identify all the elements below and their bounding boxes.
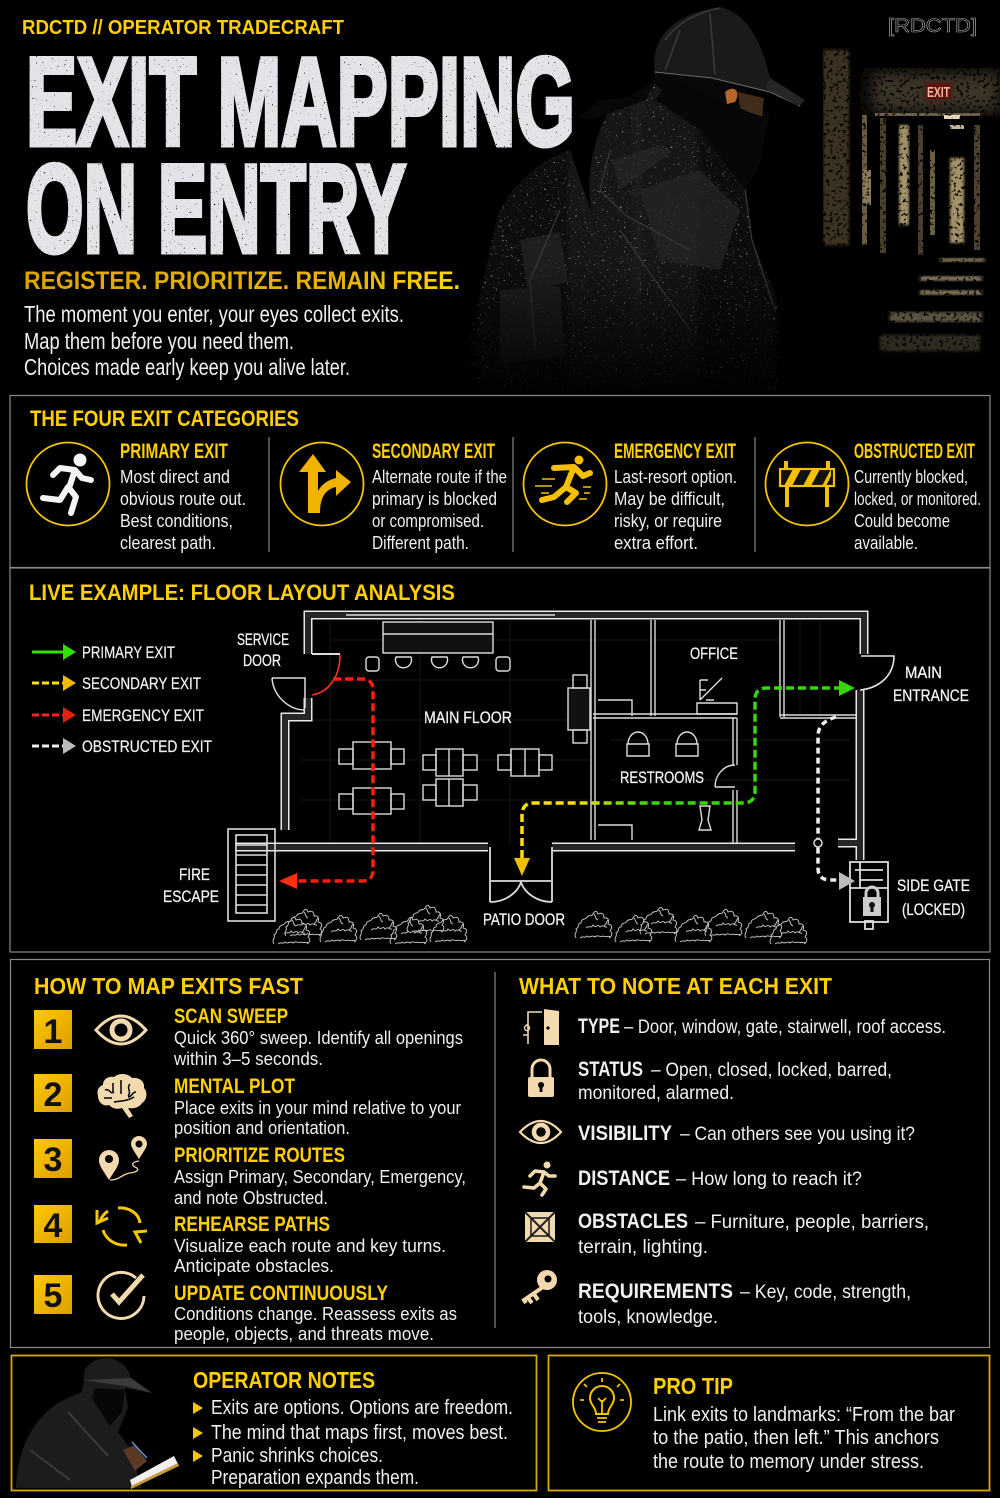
intro text: Choices made early keep you alive later. bbox=[24, 354, 350, 380]
side gate bbox=[850, 862, 888, 929]
step 5: 5 bbox=[44, 1277, 62, 1315]
note: requirements: tools, knowledge. bbox=[578, 1307, 718, 1328]
note: obstacles: terrain, lighting. bbox=[578, 1237, 708, 1258]
route: emergency bbox=[279, 679, 373, 889]
heading: LIVE EXAMPLE: FLOOR LAYOUT ANALYSIS bbox=[29, 580, 455, 605]
legend: OBSTRUCTED EXIT bbox=[82, 737, 212, 756]
hero panel bbox=[22, 7, 1000, 395]
icon: white runner bbox=[26, 442, 110, 526]
intro text: The moment you enter, your eyes collect exits. bbox=[24, 301, 404, 327]
category: obstructed exit: Currently blocked, bbox=[854, 467, 968, 487]
note: visibility bbox=[520, 1121, 915, 1145]
step 5: people, objects, and threats move. bbox=[174, 1323, 434, 1344]
step 1: Quick 360° sweep. Identify all openings bbox=[174, 1027, 463, 1048]
icon: gold runner bbox=[524, 442, 606, 526]
category: emergency exit: Last-resort option. bbox=[614, 467, 737, 487]
hero operator figure bbox=[460, 7, 805, 395]
note: distance: – How long to reach it? bbox=[676, 1169, 862, 1190]
icon: light bulb bbox=[573, 1373, 631, 1431]
note: obstacles: – Furniture, people, barriers, bbox=[695, 1212, 929, 1233]
notes text: The mind that maps first, moves best. bbox=[211, 1422, 508, 1444]
step 3: 3 bbox=[44, 1141, 62, 1179]
step 3: and note Obstructed. bbox=[174, 1187, 328, 1208]
tip text bbox=[653, 1404, 955, 1473]
note: requirements: – Key, code, strength, bbox=[740, 1282, 911, 1303]
note: requirements bbox=[524, 1270, 911, 1328]
category: primary exit: PRIMARY EXIT bbox=[120, 440, 228, 463]
labels: ESCAPE bbox=[163, 887, 219, 906]
legend: SECONDARY EXIT bbox=[82, 674, 201, 693]
category: secondary exit: Alternate route if the bbox=[372, 467, 507, 487]
legend: EMERGENCY EXIT bbox=[82, 706, 204, 725]
title: EXIT MAPPING bbox=[26, 33, 575, 172]
subtitle: REGISTER. PRIORITIZE. REMAIN FREE. bbox=[24, 267, 460, 295]
bushes bbox=[273, 905, 807, 944]
panel: how to map and what to note bbox=[10, 960, 990, 1348]
step 1: 1 bbox=[44, 1013, 62, 1051]
icon: door bbox=[523, 1009, 559, 1045]
tagline: RDCTD // OPERATOR TRADECRAFT bbox=[22, 17, 344, 39]
patio door bbox=[489, 847, 553, 902]
step 2: MENTAL PLOT bbox=[174, 1075, 295, 1098]
labels: MAIN FLOOR bbox=[424, 708, 512, 727]
note: visibility: VISIBILITY bbox=[578, 1122, 672, 1145]
icon: split arrow bbox=[280, 442, 364, 526]
icon: brain bbox=[97, 1074, 146, 1118]
note: status: STATUS bbox=[578, 1058, 643, 1081]
panel: floor layout bbox=[10, 568, 990, 952]
step 3: Assign Primary, Secondary, Emergency, bbox=[174, 1166, 466, 1187]
category: emergency exit: risky, or require bbox=[614, 511, 722, 531]
panel: operator notes bbox=[12, 1356, 536, 1490]
fire escape stairs bbox=[228, 829, 275, 921]
notes text: Panic shrinks choices. bbox=[211, 1445, 383, 1467]
legend bbox=[32, 643, 212, 756]
category: obstructed exit: available. bbox=[854, 533, 918, 553]
category: obstructed exit: Could become bbox=[854, 511, 950, 531]
bullets bbox=[193, 1402, 203, 1462]
notes text bbox=[211, 1397, 513, 1489]
icon: cycle arrows bbox=[97, 1208, 147, 1245]
route: secondary and primary bbox=[514, 680, 855, 876]
category: secondary exit bbox=[280, 440, 507, 553]
heading: what to note: WHAT TO NOTE AT EACH EXIT bbox=[519, 973, 832, 999]
note: distance: DISTANCE bbox=[578, 1167, 670, 1190]
furniture bbox=[339, 622, 737, 830]
category: secondary exit: primary is blocked bbox=[372, 489, 497, 509]
category: secondary exit: or compromised. bbox=[372, 511, 484, 531]
legend: PRIMARY EXIT bbox=[82, 643, 175, 662]
category: emergency exit: May be difficult, bbox=[614, 489, 725, 509]
interior walls bbox=[591, 620, 856, 843]
step 5 bbox=[34, 1272, 457, 1344]
category: secondary exit: SECONDARY EXIT bbox=[372, 440, 495, 463]
step 4: Visualize each route and key turns. bbox=[174, 1235, 446, 1256]
icon: barricade bbox=[766, 442, 848, 526]
step 4: 4 bbox=[44, 1207, 63, 1245]
service door bbox=[272, 654, 340, 710]
title bbox=[26, 33, 575, 279]
note: type: – Door, window, gate, stairwell, roof access. bbox=[624, 1017, 946, 1038]
icon: eye bbox=[520, 1121, 561, 1143]
labels: SERVICE bbox=[237, 630, 289, 649]
step 4: REHEARSE PATHS bbox=[174, 1213, 330, 1236]
labels: RESTROOMS bbox=[620, 768, 704, 787]
note: obstacles bbox=[525, 1210, 929, 1258]
notes text: Exits are options. Options are freedom. bbox=[211, 1397, 513, 1419]
hero corridor photo bbox=[823, 35, 1000, 390]
outer walls bbox=[235, 615, 864, 860]
tip text: Link exits to landmarks: “From the bar bbox=[653, 1404, 955, 1426]
main entrance door bbox=[860, 656, 894, 690]
note: type bbox=[523, 1009, 946, 1045]
title: ON ENTRY bbox=[26, 140, 406, 279]
step 3: PRIORITIZE ROUTES bbox=[174, 1144, 345, 1167]
notes text: Preparation expands them. bbox=[211, 1467, 419, 1489]
labels: ENTRANCE bbox=[893, 686, 969, 705]
note: requirements: REQUIREMENTS bbox=[578, 1280, 733, 1303]
category: primary exit: obvious route out. bbox=[120, 489, 246, 509]
category: primary exit bbox=[26, 440, 246, 553]
category: obstructed exit bbox=[766, 440, 981, 553]
note: visibility: – Can others see you using it? bbox=[680, 1124, 915, 1145]
labels: PATIO DOOR bbox=[483, 910, 565, 929]
intro text: Map them before you need them. bbox=[24, 328, 294, 354]
step 2: 2 bbox=[44, 1076, 62, 1114]
icon: key bbox=[524, 1270, 557, 1303]
step 2: position and orientation. bbox=[174, 1117, 350, 1138]
heading: how to map: HOW TO MAP EXITS FAST bbox=[34, 973, 303, 999]
route: obstructed bbox=[814, 717, 855, 890]
chart: floor plan bbox=[163, 615, 970, 944]
icon: map pins bbox=[99, 1136, 147, 1180]
icon: crate bbox=[525, 1212, 555, 1242]
panel: four exit categories bbox=[10, 396, 990, 568]
step 3 bbox=[34, 1136, 466, 1208]
category: primary exit: clearest path. bbox=[120, 533, 216, 553]
labels: DOOR bbox=[243, 651, 281, 670]
tip text: the route to memory under stress. bbox=[653, 1451, 924, 1473]
category: emergency exit bbox=[524, 440, 737, 553]
note: distance bbox=[524, 1162, 862, 1195]
step 4 bbox=[34, 1205, 446, 1276]
icon: runner bbox=[524, 1162, 555, 1195]
step 2: Place exits in your mind relative to your bbox=[174, 1097, 461, 1118]
step 2 bbox=[34, 1074, 461, 1138]
tip text: to the patio, then left.” This anchors bbox=[653, 1427, 939, 1449]
icon: eye bbox=[96, 1016, 146, 1044]
panel: pro tip bbox=[548, 1356, 990, 1490]
step 1: SCAN SWEEP bbox=[174, 1005, 288, 1028]
labels: SIDE GATE bbox=[897, 876, 970, 895]
operator writing illustration bbox=[16, 1358, 179, 1489]
step 1 bbox=[34, 1005, 463, 1069]
category: emergency exit: extra effort. bbox=[614, 533, 698, 553]
labels: (LOCKED) bbox=[902, 900, 965, 919]
note: status: – Open, closed, locked, barred, bbox=[651, 1060, 892, 1081]
watermark: [RDCTD] bbox=[888, 16, 977, 37]
category: primary exit: Most direct and bbox=[120, 467, 230, 487]
labels bbox=[163, 630, 970, 929]
icon: padlock bbox=[528, 1060, 554, 1097]
note: type: TYPE bbox=[578, 1015, 620, 1038]
category: primary exit: Best conditions, bbox=[120, 511, 233, 531]
icon: check circle bbox=[98, 1272, 144, 1318]
icon: exit sign bbox=[923, 80, 954, 102]
intro text bbox=[24, 301, 404, 380]
heading: PRO TIP bbox=[653, 1373, 733, 1399]
note: obstacles: OBSTACLES bbox=[578, 1210, 688, 1233]
step 4: Anticipate obstacles. bbox=[174, 1255, 334, 1276]
labels: MAIN bbox=[905, 663, 942, 682]
step 5: UPDATE CONTINUOUSLY bbox=[174, 1282, 388, 1305]
heading: OPERATOR NOTES bbox=[193, 1367, 375, 1393]
heading: THE FOUR EXIT CATEGORIES bbox=[30, 406, 299, 431]
labels: OFFICE bbox=[690, 644, 738, 663]
icon: exit sign: EXIT bbox=[927, 84, 950, 101]
note: status: monitored, alarmed. bbox=[578, 1083, 734, 1104]
category: emergency exit: EMERGENCY EXIT bbox=[614, 440, 736, 463]
category: secondary exit: Different path. bbox=[372, 533, 469, 553]
step 1: within 3–5 seconds. bbox=[173, 1048, 323, 1069]
step 5: Conditions change. Reassess exits as bbox=[174, 1303, 457, 1324]
note: status bbox=[528, 1058, 892, 1104]
labels: FIRE bbox=[179, 865, 210, 884]
